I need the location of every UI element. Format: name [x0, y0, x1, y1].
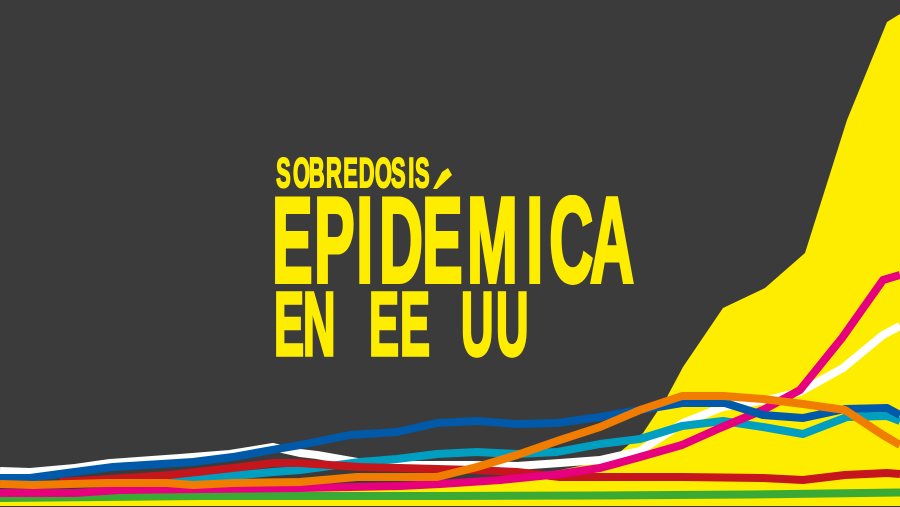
- line: orange: [0, 396, 900, 485]
- title block: [275, 157, 634, 358]
- title: accent mark: [433, 168, 452, 189]
- line: white: [0, 326, 900, 472]
- title: SOBREDOSIS: SOBREDOSIS: [276, 151, 430, 197]
- line: teal: [170, 416, 900, 481]
- title: EN EE UU: EN EE UU: [274, 275, 529, 375]
- line: green: [0, 492, 900, 498]
- line: red: [60, 463, 900, 482]
- title: EPIDÉMICA: EPIDÉMICA: [272, 173, 634, 309]
- line: blue: [0, 403, 900, 478]
- line: pink: [0, 275, 900, 493]
